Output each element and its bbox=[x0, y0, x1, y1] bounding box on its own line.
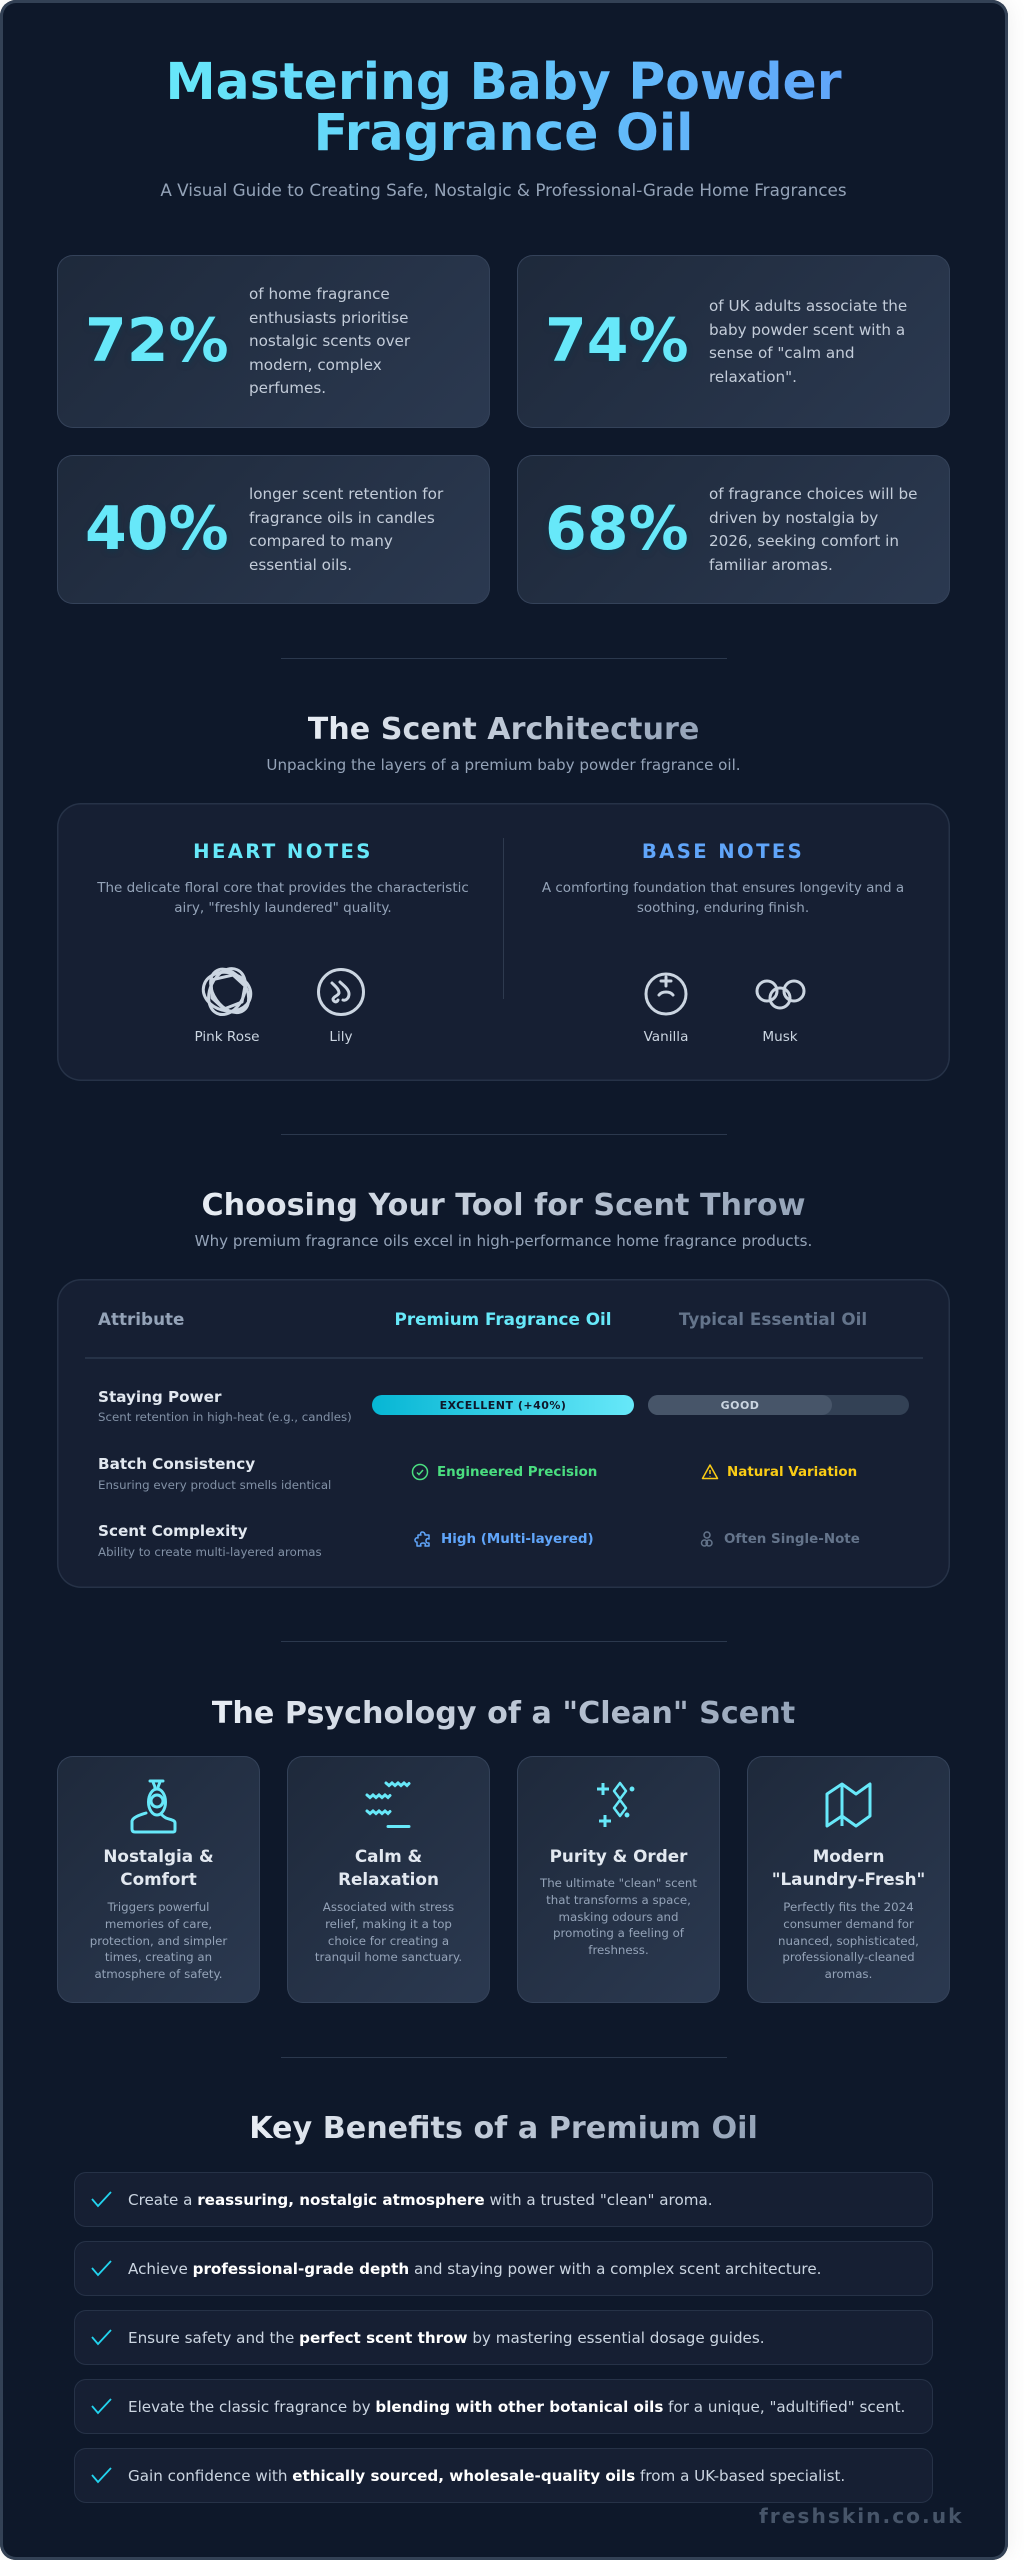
stat text: longer scent retention for bbox=[249, 485, 443, 503]
stat text: of fragrance choices will be bbox=[709, 485, 918, 503]
text: engineered precision: Engineered Precision bbox=[437, 1465, 597, 1480]
subtitle: A Visual Guide to Creating Safe, Nostalgic & Professional-Grade Home Fragrances bbox=[160, 180, 847, 200]
stat number: 40% bbox=[85, 494, 229, 564]
icon: folded map bbox=[826, 1782, 872, 1828]
stat text: of UK adults associate the bbox=[709, 297, 907, 315]
heading: choosing your tool: Choosing Your Tool for Scent Throw bbox=[201, 1188, 806, 1223]
stat number: 68% bbox=[545, 494, 689, 564]
heart notes heading: HEART NOTES bbox=[193, 840, 373, 863]
stat text: nostalgic scents over bbox=[249, 332, 410, 350]
section subtitle: Unpacking the layers of a premium baby powder fragrance oil. bbox=[266, 756, 741, 774]
column header: premium fragrance oil: Premium Fragrance Oil bbox=[395, 1309, 611, 1329]
stat text: familiar aromas. bbox=[709, 556, 833, 574]
card title: "Laundry-Fresh" bbox=[772, 1869, 925, 1889]
benefit item 4 bbox=[74, 2379, 933, 2434]
card text: times, creating an bbox=[105, 1950, 212, 1964]
card text: atmosphere of safety. bbox=[94, 1967, 223, 1981]
card text: promoting a feeling of bbox=[553, 1926, 684, 1940]
panel: comparison table bbox=[57, 1279, 950, 1588]
bar fill: good bbox=[648, 1395, 832, 1415]
heading: psychology of clean: The Psychology of a "Clean" Scent bbox=[212, 1696, 795, 1731]
stat text: essential oils. bbox=[249, 556, 352, 574]
icon: check bbox=[91, 2329, 112, 2346]
card text: masking odours and bbox=[558, 1910, 679, 1924]
stat text bbox=[249, 485, 444, 574]
card: purity and order bbox=[517, 1756, 720, 2003]
stat card: 40% bbox=[57, 455, 490, 604]
section subtitle: Why premium fragrance oils excel in high-performance home fragrance products. bbox=[195, 1232, 812, 1250]
heading: key benefits: Key Benefits of a Premium Oil bbox=[249, 2111, 758, 2146]
title: Fragrance Oil bbox=[314, 103, 693, 162]
icon: musk bbox=[756, 980, 806, 1010]
icon: warning bbox=[702, 1464, 718, 1480]
stat card: 72% bbox=[57, 255, 490, 428]
row note: staying power: Scent retention in high-heat (e.g., candles) bbox=[98, 1410, 352, 1424]
benefit item 5 bbox=[74, 2448, 933, 2503]
stat text: of home fragrance bbox=[249, 285, 390, 303]
card text: protection, and simpler bbox=[90, 1934, 227, 1948]
stat text: fragrance oils in candles bbox=[249, 508, 435, 526]
heading: scent architecture: The Scent Architecture bbox=[308, 712, 699, 747]
icon: check circle bbox=[412, 1464, 428, 1480]
card text: aromas. bbox=[825, 1967, 872, 1981]
icon: check bbox=[91, 2260, 112, 2276]
base notes description: A comforting foundation that ensures longevity and a bbox=[542, 880, 904, 896]
card text: memories of care, bbox=[105, 1917, 212, 1931]
benefit text: Ensure safety and the perfect scent throw by mastering essential dosage guides. bbox=[128, 2329, 765, 2347]
card title bbox=[772, 1846, 925, 1889]
stat number: 74% bbox=[545, 306, 689, 376]
card text bbox=[315, 1900, 462, 1964]
label: lily: Lily bbox=[329, 1029, 353, 1045]
stat number: 72% bbox=[85, 306, 229, 376]
stat text bbox=[709, 485, 918, 574]
stat text: driven by nostalgia by bbox=[709, 508, 878, 526]
card: nostalgia and comfort bbox=[57, 1756, 260, 2003]
card text bbox=[778, 1900, 919, 1981]
benefit text: Create a reassuring, nostalgic atmosphere with a trusted "clean" aroma. bbox=[128, 2191, 713, 2209]
card text bbox=[90, 1900, 228, 1981]
icon: calm waves bbox=[365, 1781, 411, 1828]
text: often single-note: Often Single-Note bbox=[724, 1532, 860, 1547]
label: vanilla: Vanilla bbox=[644, 1029, 688, 1045]
card title: Purity & Order bbox=[550, 1846, 687, 1866]
card text: relief, making it a top bbox=[325, 1917, 452, 1931]
card text: Associated with stress bbox=[323, 1900, 454, 1914]
benefit item 3 bbox=[74, 2310, 933, 2365]
stat text: baby powder scent with a bbox=[709, 320, 905, 338]
stat text: enthusiasts prioritise bbox=[249, 308, 409, 326]
base notes heading: BASE NOTES bbox=[642, 840, 804, 863]
stat text: perfumes. bbox=[249, 379, 326, 397]
base notes description bbox=[542, 880, 904, 916]
card title: Relaxation bbox=[338, 1869, 439, 1889]
text: natural variation: Natural Variation bbox=[727, 1465, 857, 1480]
card title: Comfort bbox=[120, 1869, 197, 1889]
icon: check bbox=[91, 2398, 112, 2414]
card text bbox=[540, 1876, 697, 1957]
text: high multi-layered: High (Multi-layered) bbox=[441, 1532, 594, 1547]
stat card: 68% bbox=[517, 455, 950, 604]
stat text bbox=[249, 285, 410, 397]
icon: sparkles bbox=[597, 1782, 634, 1827]
benefit text: Elevate the classic fragrance by blending with other botanical oils for a unique, "adultified" scent. bbox=[128, 2398, 905, 2416]
icon: lily bbox=[317, 968, 365, 1016]
stat card: 74% bbox=[517, 255, 950, 428]
bar: premium excellent bbox=[372, 1395, 634, 1415]
icon: check bbox=[91, 2191, 112, 2208]
icon: check bbox=[91, 2467, 112, 2484]
stat text: compared to many bbox=[249, 532, 393, 550]
panel: scent architecture bbox=[57, 803, 950, 1081]
base notes description: soothing, enduring finish. bbox=[637, 900, 809, 916]
card title bbox=[338, 1846, 439, 1889]
card: calm and relaxation bbox=[287, 1756, 490, 2003]
row label: scent complexity: Scent Complexity bbox=[98, 1522, 248, 1540]
benefit text: Achieve professional-grade depth and staying power with a complex scent architecture. bbox=[128, 2260, 821, 2278]
card text: freshness. bbox=[588, 1943, 649, 1957]
card text: Perfectly fits the 2024 bbox=[783, 1900, 914, 1914]
label: pink rose: Pink Rose bbox=[194, 1029, 260, 1045]
watermark: freshskin.co.uk bbox=[759, 2504, 964, 2528]
card title: Nostalgia & bbox=[103, 1846, 214, 1866]
card text: Triggers powerful bbox=[108, 1900, 209, 1914]
stat text: 2026, seeking comfort in bbox=[709, 532, 899, 550]
icon: pink rose bbox=[202, 967, 252, 1016]
benefit item 1 bbox=[74, 2172, 933, 2227]
icon: puzzle bbox=[414, 1531, 430, 1547]
column header: attribute: Attribute bbox=[98, 1309, 184, 1329]
bar: premium excellent: EXCELLENT (+40%) bbox=[440, 1399, 566, 1412]
title: Mastering Baby Powder bbox=[165, 52, 842, 111]
card text: choice for creating a bbox=[328, 1934, 449, 1948]
card text: consumer demand for bbox=[783, 1917, 914, 1931]
card: modern laundry-fresh bbox=[747, 1756, 950, 2003]
card text: tranquil home sanctuary. bbox=[315, 1950, 462, 1964]
row label: batch consistency: Batch Consistency bbox=[98, 1455, 255, 1473]
benefit item 2 bbox=[74, 2241, 933, 2296]
label: musk: Musk bbox=[762, 1029, 798, 1045]
row note: scent complexity: Ability to create multi-layered aromas bbox=[98, 1545, 322, 1559]
heart notes description: The delicate floral core that provides the characteristic bbox=[97, 880, 469, 896]
card text: nuanced, sophisticated, bbox=[778, 1934, 919, 1948]
stat text: sense of "calm and bbox=[709, 344, 854, 362]
card title bbox=[103, 1846, 214, 1889]
stat text: modern, complex bbox=[249, 356, 382, 374]
stat text bbox=[709, 297, 907, 386]
row note: batch consistency: Ensuring every product smells identical bbox=[98, 1478, 331, 1492]
heart notes description bbox=[97, 880, 469, 916]
column header: typical essential oil: Typical Essential Oil bbox=[679, 1309, 867, 1329]
card title: Calm & bbox=[355, 1846, 422, 1866]
card text: The ultimate "clean" scent bbox=[540, 1876, 697, 1890]
heart notes description: airy, "freshly laundered" quality. bbox=[174, 900, 392, 916]
icon: powder bottle bbox=[130, 1780, 176, 1834]
icon: vanilla bbox=[644, 972, 688, 1016]
bar: essential good bbox=[648, 1395, 909, 1415]
benefit text: Gain confidence with ethically sourced, wholesale-quality oils from a UK-based specialist. bbox=[128, 2467, 845, 2485]
card title: Modern bbox=[813, 1846, 884, 1866]
bar fill: good: GOOD bbox=[721, 1399, 759, 1412]
title bbox=[165, 52, 842, 162]
card text: professionally-cleaned bbox=[782, 1950, 915, 1964]
icon: single note bbox=[700, 1531, 713, 1547]
stat text: relaxation". bbox=[709, 368, 797, 386]
row label: staying power: Staying Power bbox=[98, 1388, 221, 1406]
card text: that transforms a space, bbox=[546, 1893, 691, 1907]
